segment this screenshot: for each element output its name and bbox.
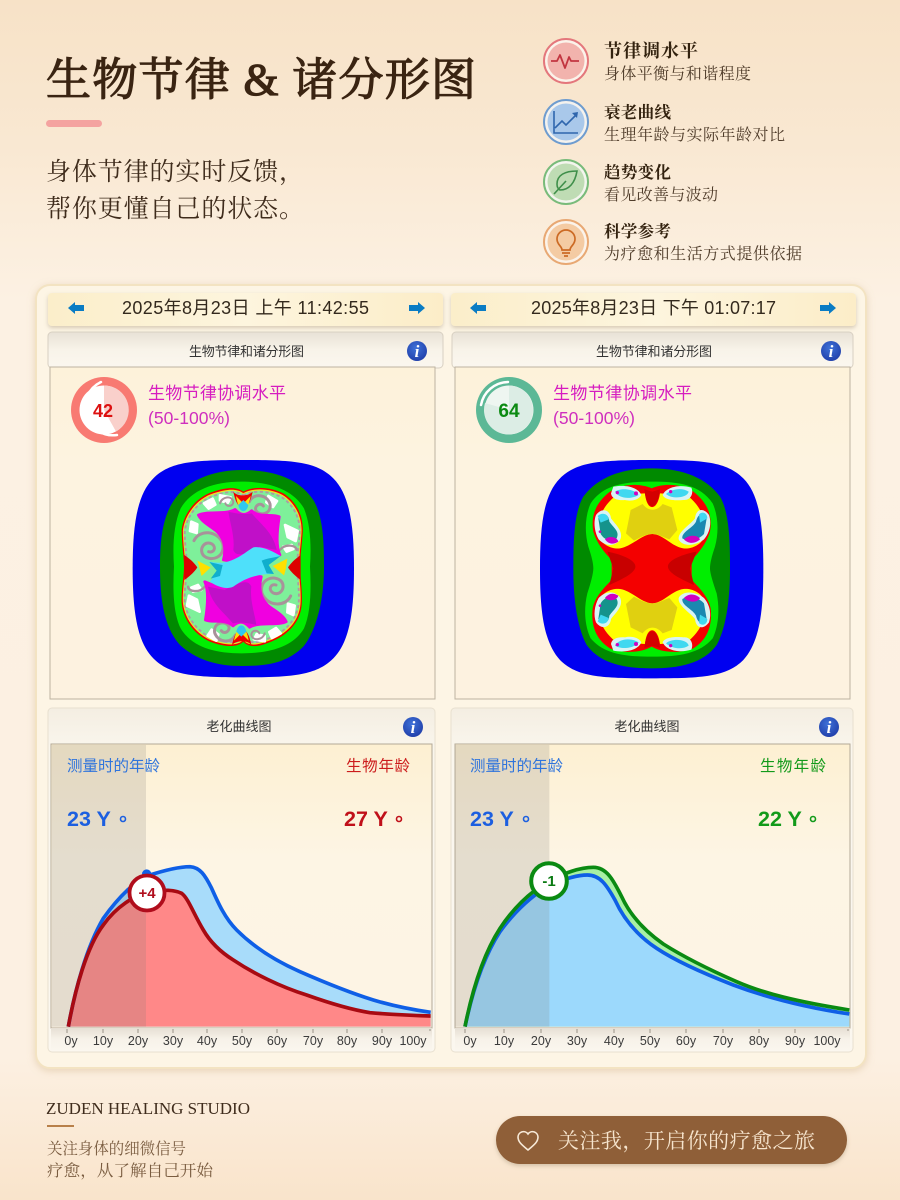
date bar right: [451, 293, 856, 326]
gauge label: (50-100%): [553, 408, 635, 428]
follow button: [496, 1116, 847, 1164]
legend item: science: 科学参考: [604, 221, 671, 241]
date bar left: [48, 293, 443, 326]
marker -1: [531, 863, 567, 899]
footer studio block: 关注身体的细微信号: [47, 1140, 186, 1158]
footer studio block: [46, 1099, 250, 1180]
legend item: aging curve: 衰老曲线: [604, 102, 672, 122]
legend item: aging curve: [544, 100, 785, 144]
x axis: 90y: [785, 1034, 806, 1048]
area chart: [52, 745, 431, 1027]
x axis: 40y: [604, 1034, 625, 1048]
marker +4: [130, 876, 164, 910]
panel: fractal right: 生物节律和诸分形图: [596, 344, 712, 359]
icon: info: i: [411, 718, 416, 737]
legend item: rhythm level: 节律调水平: [604, 40, 698, 61]
footer studio block: ZUDEN HEALING STUDIO: [46, 1099, 250, 1118]
icon: info: [821, 341, 841, 361]
icon: heart: [518, 1132, 538, 1150]
icon: info: i: [415, 342, 420, 361]
x axis: 30y: [163, 1034, 184, 1048]
date bar left: 2025年8月23日 上午 11:42:55: [122, 298, 369, 318]
fractal image left: [133, 460, 354, 677]
panel: aging chart left: [48, 708, 435, 1052]
gauge 42: [71, 377, 137, 443]
x axis: 70y: [303, 1034, 324, 1048]
biological age: [344, 757, 410, 831]
x axis: 100y: [399, 1034, 427, 1048]
x axis: 90y: [372, 1034, 393, 1048]
panel: aging chart left: 老化曲线图: [206, 719, 272, 734]
measured age: 23 Y: [67, 807, 111, 831]
marker -1: -1: [542, 873, 556, 890]
fractal image right: [540, 460, 763, 678]
panel: aging chart right: 老化曲线图: [614, 719, 680, 734]
icon: info: [819, 717, 839, 737]
x axis: 80y: [337, 1034, 358, 1048]
measured age: 测量时的年龄: [67, 757, 160, 775]
x axis: 100y: [813, 1034, 841, 1048]
legend item: science: 为疗愈和生活方式提供依据: [604, 244, 802, 263]
main card: [36, 285, 866, 1068]
legend item: trend: 看见改善与波动: [604, 186, 718, 204]
x axis: 0y: [463, 1034, 477, 1048]
legend item: trend: 趋势变化: [604, 162, 672, 182]
legend item: rhythm level: [544, 39, 751, 83]
x axis: 40y: [197, 1034, 218, 1048]
icon: info: i: [829, 342, 834, 361]
x axis: 50y: [640, 1034, 661, 1048]
x axis: 0y: [64, 1034, 78, 1048]
measured age: [67, 757, 160, 831]
x axis: [51, 1028, 432, 1050]
follow button: 关注我，开启你的疗愈之旅: [558, 1129, 815, 1154]
footer studio block: 疗愈，从了解自己开始: [47, 1162, 214, 1180]
legend item: science: [544, 220, 802, 264]
x axis: 70y: [713, 1034, 734, 1048]
panel: fractal left: 生物节律和诸分形图: [189, 344, 304, 359]
biological age: 生物年龄: [760, 757, 826, 775]
gauge label: 生物节律协调水平: [553, 384, 692, 403]
x axis: 10y: [494, 1034, 515, 1048]
title accent bar: [46, 120, 102, 127]
x axis: 50y: [232, 1034, 253, 1048]
icon: info: i: [827, 718, 832, 737]
x axis: 60y: [676, 1034, 697, 1048]
area chart: [455, 745, 849, 1027]
panel: aging chart right: [451, 708, 853, 1052]
subtitle: 身体节律的实时反馈，: [46, 158, 304, 186]
biological age: [758, 757, 826, 831]
measured age: 23 Y: [470, 807, 514, 831]
icon: info: [407, 341, 427, 361]
biological age: 27 Y: [344, 807, 388, 831]
gauge label: [148, 384, 286, 428]
biological age: 生物年龄: [346, 757, 410, 775]
panel: fractal left: [48, 332, 443, 699]
gauge 42: 42: [93, 401, 113, 421]
x axis: 10y: [93, 1034, 114, 1048]
gauge 64: [476, 377, 542, 443]
measured age: [470, 757, 563, 831]
x axis: 20y: [128, 1034, 149, 1048]
x axis: 30y: [567, 1034, 588, 1048]
icon: info: [403, 717, 423, 737]
gauge label: (50-100%): [148, 408, 230, 428]
biological age: 22 Y: [758, 807, 802, 831]
panel: fractal right: [452, 332, 853, 699]
date bar right: 2025年8月23日 下午 01:07:17: [531, 298, 776, 318]
x axis: 20y: [531, 1034, 552, 1048]
gauge label: [553, 384, 692, 428]
legend: [544, 39, 802, 264]
gauge label: 生物节律协调水平: [148, 384, 286, 403]
x axis: 80y: [749, 1034, 770, 1048]
legend item: rhythm level: 身体平衡与和谐程度: [604, 65, 751, 83]
subtitle: 帮你更懂自己的状态。: [46, 195, 304, 223]
measured age: 测量时的年龄: [470, 757, 563, 775]
title: 生物节律 & 诸分形图: [46, 55, 476, 105]
legend item: trend: [544, 160, 718, 204]
subtitle: [46, 158, 304, 223]
x axis: [455, 1028, 850, 1050]
marker +4: +4: [138, 885, 156, 902]
legend item: aging curve: 生理年龄与实际年龄对比: [604, 125, 785, 144]
x axis: 60y: [267, 1034, 288, 1048]
gauge 64: 64: [498, 401, 520, 422]
